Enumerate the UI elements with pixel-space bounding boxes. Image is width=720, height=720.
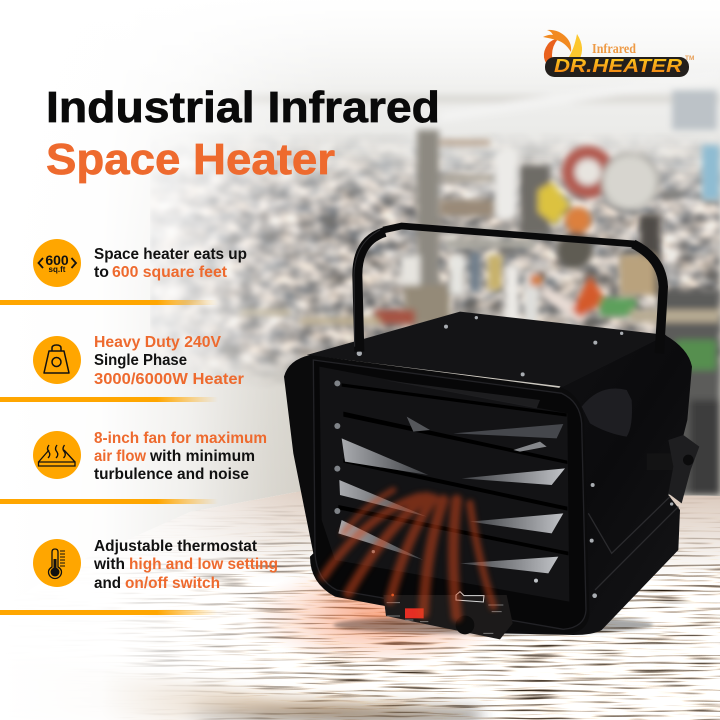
product: heater bbox=[284, 226, 699, 639]
icon: weight bbox=[33, 336, 81, 384]
icon: 600 sq.ft: sq.ft bbox=[49, 265, 66, 274]
top screws bbox=[357, 316, 673, 598]
text: fan: turbulence and noise bbox=[94, 466, 249, 483]
handle bbox=[354, 226, 663, 353]
text: coverage: Space heater eats up bbox=[94, 246, 247, 263]
text: thermostat: Adjustable thermostat bbox=[94, 538, 257, 555]
divider bar 4 bbox=[0, 610, 218, 615]
front frame edge bbox=[313, 360, 586, 629]
text: fan: 8-inch fan for maximum bbox=[94, 430, 267, 447]
louver top grille bbox=[342, 383, 567, 417]
text: thermostat: with bbox=[93, 556, 125, 573]
text: thermostat: on/off switch bbox=[125, 575, 220, 592]
heater side panel bbox=[500, 335, 692, 635]
text: coverage: to bbox=[94, 264, 109, 281]
blurred front edge of table bbox=[113, 677, 490, 720]
feature: coverage bbox=[33, 239, 247, 287]
text: coverage: 600 square feet bbox=[112, 264, 227, 281]
title: Space Heater bbox=[46, 135, 335, 184]
divider bar 3 bbox=[0, 499, 218, 504]
heat waves bbox=[323, 490, 493, 617]
icon: thermometer bbox=[33, 539, 81, 587]
text: fan: air flow bbox=[94, 448, 147, 465]
side reflection bbox=[582, 389, 632, 437]
icon: 600 sq.ft bbox=[33, 239, 81, 287]
icon: heat mat bbox=[33, 431, 81, 479]
heat glow on table bbox=[258, 576, 489, 660]
text: power: 3000/6000W Heater bbox=[94, 371, 244, 388]
feature: fan bbox=[33, 430, 267, 483]
mounting knob bbox=[647, 435, 699, 503]
logo TM: TM bbox=[685, 55, 694, 62]
text: power: Heavy Duty 240V bbox=[94, 334, 222, 351]
control box bbox=[383, 592, 513, 639]
side bracket line bbox=[588, 497, 678, 590]
logo flame bbox=[543, 30, 582, 70]
louvers opening bbox=[319, 367, 569, 602]
wooden table bbox=[122, 491, 720, 720]
louver highlights bbox=[342, 438, 428, 475]
divider bar 2 bbox=[0, 397, 218, 402]
text: coverage bbox=[94, 246, 247, 281]
louver screws bbox=[334, 380, 340, 514]
text: fan bbox=[94, 430, 267, 483]
text: thermostat: and bbox=[94, 575, 121, 592]
logo: Infrared Dr. Heater bbox=[543, 30, 694, 77]
text: fan: with minimum bbox=[149, 448, 255, 465]
logo wordmark: DR.HEATER bbox=[554, 56, 682, 76]
heater top panel bbox=[307, 312, 667, 387]
contact shadow bbox=[333, 616, 653, 634]
logo pill bbox=[545, 57, 689, 77]
title bbox=[46, 83, 440, 184]
text: power: Single Phase bbox=[94, 352, 187, 369]
background: blurred workshop bbox=[133, 52, 720, 536]
icon: 600 sq.ft: 600 bbox=[45, 252, 69, 268]
feature: thermostat bbox=[33, 538, 278, 592]
logo infrared: Infrared bbox=[592, 42, 636, 57]
text: thermostat: high and low setting bbox=[129, 556, 278, 573]
text: power bbox=[94, 334, 244, 388]
divider bar 1 bbox=[0, 300, 218, 305]
title: Industrial Infrared bbox=[46, 83, 440, 132]
feature: power bbox=[33, 334, 244, 388]
heater front hood bbox=[284, 355, 589, 634]
text: thermostat bbox=[93, 538, 278, 592]
